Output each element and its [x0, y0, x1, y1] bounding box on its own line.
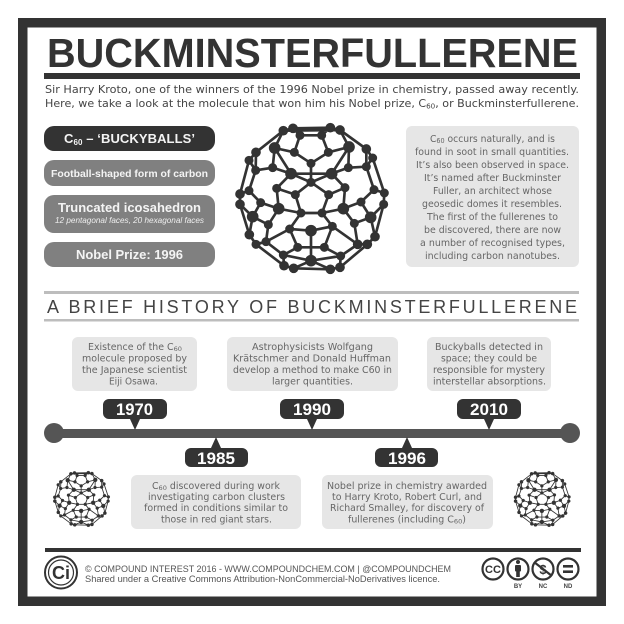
icon: CC	[482, 558, 504, 580]
year tag: 1990	[280, 399, 344, 430]
event box: 1985	[131, 475, 301, 529]
intro text: Sir Harry Kroto, one of the winners of the 1996 Nobel prize in chemistry, passed away recently.	[45, 83, 579, 96]
icon: ND: ND	[564, 584, 573, 590]
panel: description	[406, 126, 579, 267]
molecule: small right	[514, 471, 571, 527]
panel: description: C	[430, 134, 437, 145]
title: BUCKMINSTERFULLERENE	[47, 30, 578, 76]
panel: description: geosedic domes it resembles.	[422, 199, 562, 210]
pill: C60 buckyballs: C	[64, 131, 73, 146]
icon: CC: CC	[485, 564, 501, 576]
pill: football-shaped: Football-shaped form of carbon	[51, 168, 208, 180]
pill: C60 buckyballs	[44, 126, 215, 151]
panel: description: 60	[436, 137, 445, 145]
panel: description: Fuller, an architect whose	[433, 186, 552, 197]
footer rule	[45, 548, 581, 552]
footer credits: Shared under a Creative Commons Attribution-NonCommercial-NoDerivatives licence.	[85, 574, 440, 585]
pill: Nobel prize	[44, 242, 215, 267]
intro text: , or Buckminsterfullerene.	[435, 97, 579, 110]
panel: description: It’s also been observed in space.	[416, 160, 569, 171]
event box: 1985: 60	[159, 484, 167, 492]
year tag: 1990: 1990	[293, 401, 331, 419]
event box: 2010: space; they could be	[441, 354, 537, 364]
panel: description: a number of recognised types,	[420, 238, 565, 249]
footer credits: © COMPOUND INTEREST 2016 - WWW.COMPOUNDCHEM.COM | @COMPOUNDCHEM	[85, 564, 451, 575]
event box: 1990: develop a method to make C60 in	[233, 365, 392, 376]
intro text	[45, 83, 579, 110]
event box: 1970: the Japanese scientist	[82, 365, 187, 376]
event box: 1996: to Harry Kroto, Robert Curl, and	[332, 492, 482, 503]
icon: NC	[532, 558, 554, 590]
event box: 1970: Eiji Osawa.	[109, 376, 158, 388]
panel: description: It’s named after Buckminster	[424, 173, 562, 184]
event box: 1970: molecule proposed by	[82, 354, 187, 364]
event box: 1996: Nobel prize in chemistry awarded	[327, 481, 487, 492]
panel: description: The first of the fullerenes to	[426, 212, 558, 223]
logo: Compound Interest	[45, 556, 77, 588]
event box: 1985: investigating carbon clusters	[148, 492, 285, 503]
title rule	[44, 73, 580, 79]
timeline bar	[44, 423, 580, 443]
event box: 2010: Buckyballs detected in	[435, 342, 543, 353]
pill: C60 buckyballs: – ‘BUCKYBALLS’	[83, 131, 195, 146]
year tag: 1985: 1985	[197, 450, 235, 468]
event box: 1996: Richard Smalley, for discovery of	[330, 503, 485, 514]
event box: 1996: 60	[454, 518, 462, 526]
panel: description: including carbon nanotubes.	[425, 251, 560, 262]
icon: BY	[508, 558, 528, 590]
molecule: small left	[53, 471, 110, 527]
event box: 1990: larger quantities.	[272, 376, 353, 388]
year tag: 2010: 2010	[470, 401, 508, 419]
event box: 1985: those in red giant stars.	[161, 514, 272, 526]
pill: Nobel prize: Nobel Prize: 1996	[76, 247, 183, 262]
section heading: A BRIEF HISTORY OF BUCKMINSTERFULLERENE	[47, 297, 577, 317]
event box: 2010: interstellar absorptions.	[433, 376, 546, 388]
icon: BY: BY	[514, 584, 522, 590]
pill: football-shaped	[44, 160, 215, 186]
footer credits	[85, 564, 451, 585]
intro text: 60	[426, 102, 435, 110]
year tag: 1970	[103, 399, 167, 430]
year tag: 1970: 1970	[116, 401, 153, 419]
icon: NC: $	[539, 562, 547, 577]
section heading	[44, 291, 579, 322]
intro text: Here, we take a look at the molecule that won him his Nobel prize, C	[45, 97, 417, 110]
event box: 1990: Astrophysicists Wolfgang	[252, 342, 373, 353]
event box: 1990: Krätschmer and Donald Huffman	[233, 354, 391, 364]
year tag: 1996	[375, 437, 438, 468]
event box: 1996: )	[462, 514, 466, 526]
event box: 1996: fullerenes (including C	[348, 514, 452, 526]
event box: 1996	[322, 475, 493, 529]
year tag: 1996: 1996	[388, 450, 426, 468]
event box: 1970	[72, 337, 197, 391]
event box: 1985: C	[152, 481, 158, 492]
event box: 1970: Existence of the C	[88, 342, 172, 353]
event box: 2010: responsible for mystery	[433, 365, 546, 376]
panel: description: found in soot in small quantities.	[415, 147, 569, 158]
event box: 2010	[427, 337, 551, 391]
year tag: 1985	[185, 437, 248, 468]
event box: 1990	[227, 337, 398, 391]
icon: ND	[558, 558, 578, 590]
event box: 1970: 60	[174, 345, 182, 353]
logo: Compound Interest: Ci	[52, 563, 70, 583]
pill: truncated icosahedron	[44, 195, 215, 233]
year tag: 2010	[457, 399, 521, 430]
pill: C60 buckyballs: 60	[73, 138, 83, 147]
icon: NC: NC	[539, 584, 548, 590]
molecule: main buckyball	[236, 123, 388, 274]
panel: description: occurs naturally, and is	[445, 134, 555, 145]
panel: description: be discovered, there are now	[424, 225, 561, 236]
event box: 1985: formed in conditions similar to	[144, 503, 288, 514]
pill: truncated icosahedron: Truncated icosahedron	[58, 200, 201, 215]
event box: 1985: discovered during work	[167, 481, 281, 492]
pill: truncated icosahedron: 12 pentagonal faces, 20 hexagonal faces	[55, 216, 204, 225]
